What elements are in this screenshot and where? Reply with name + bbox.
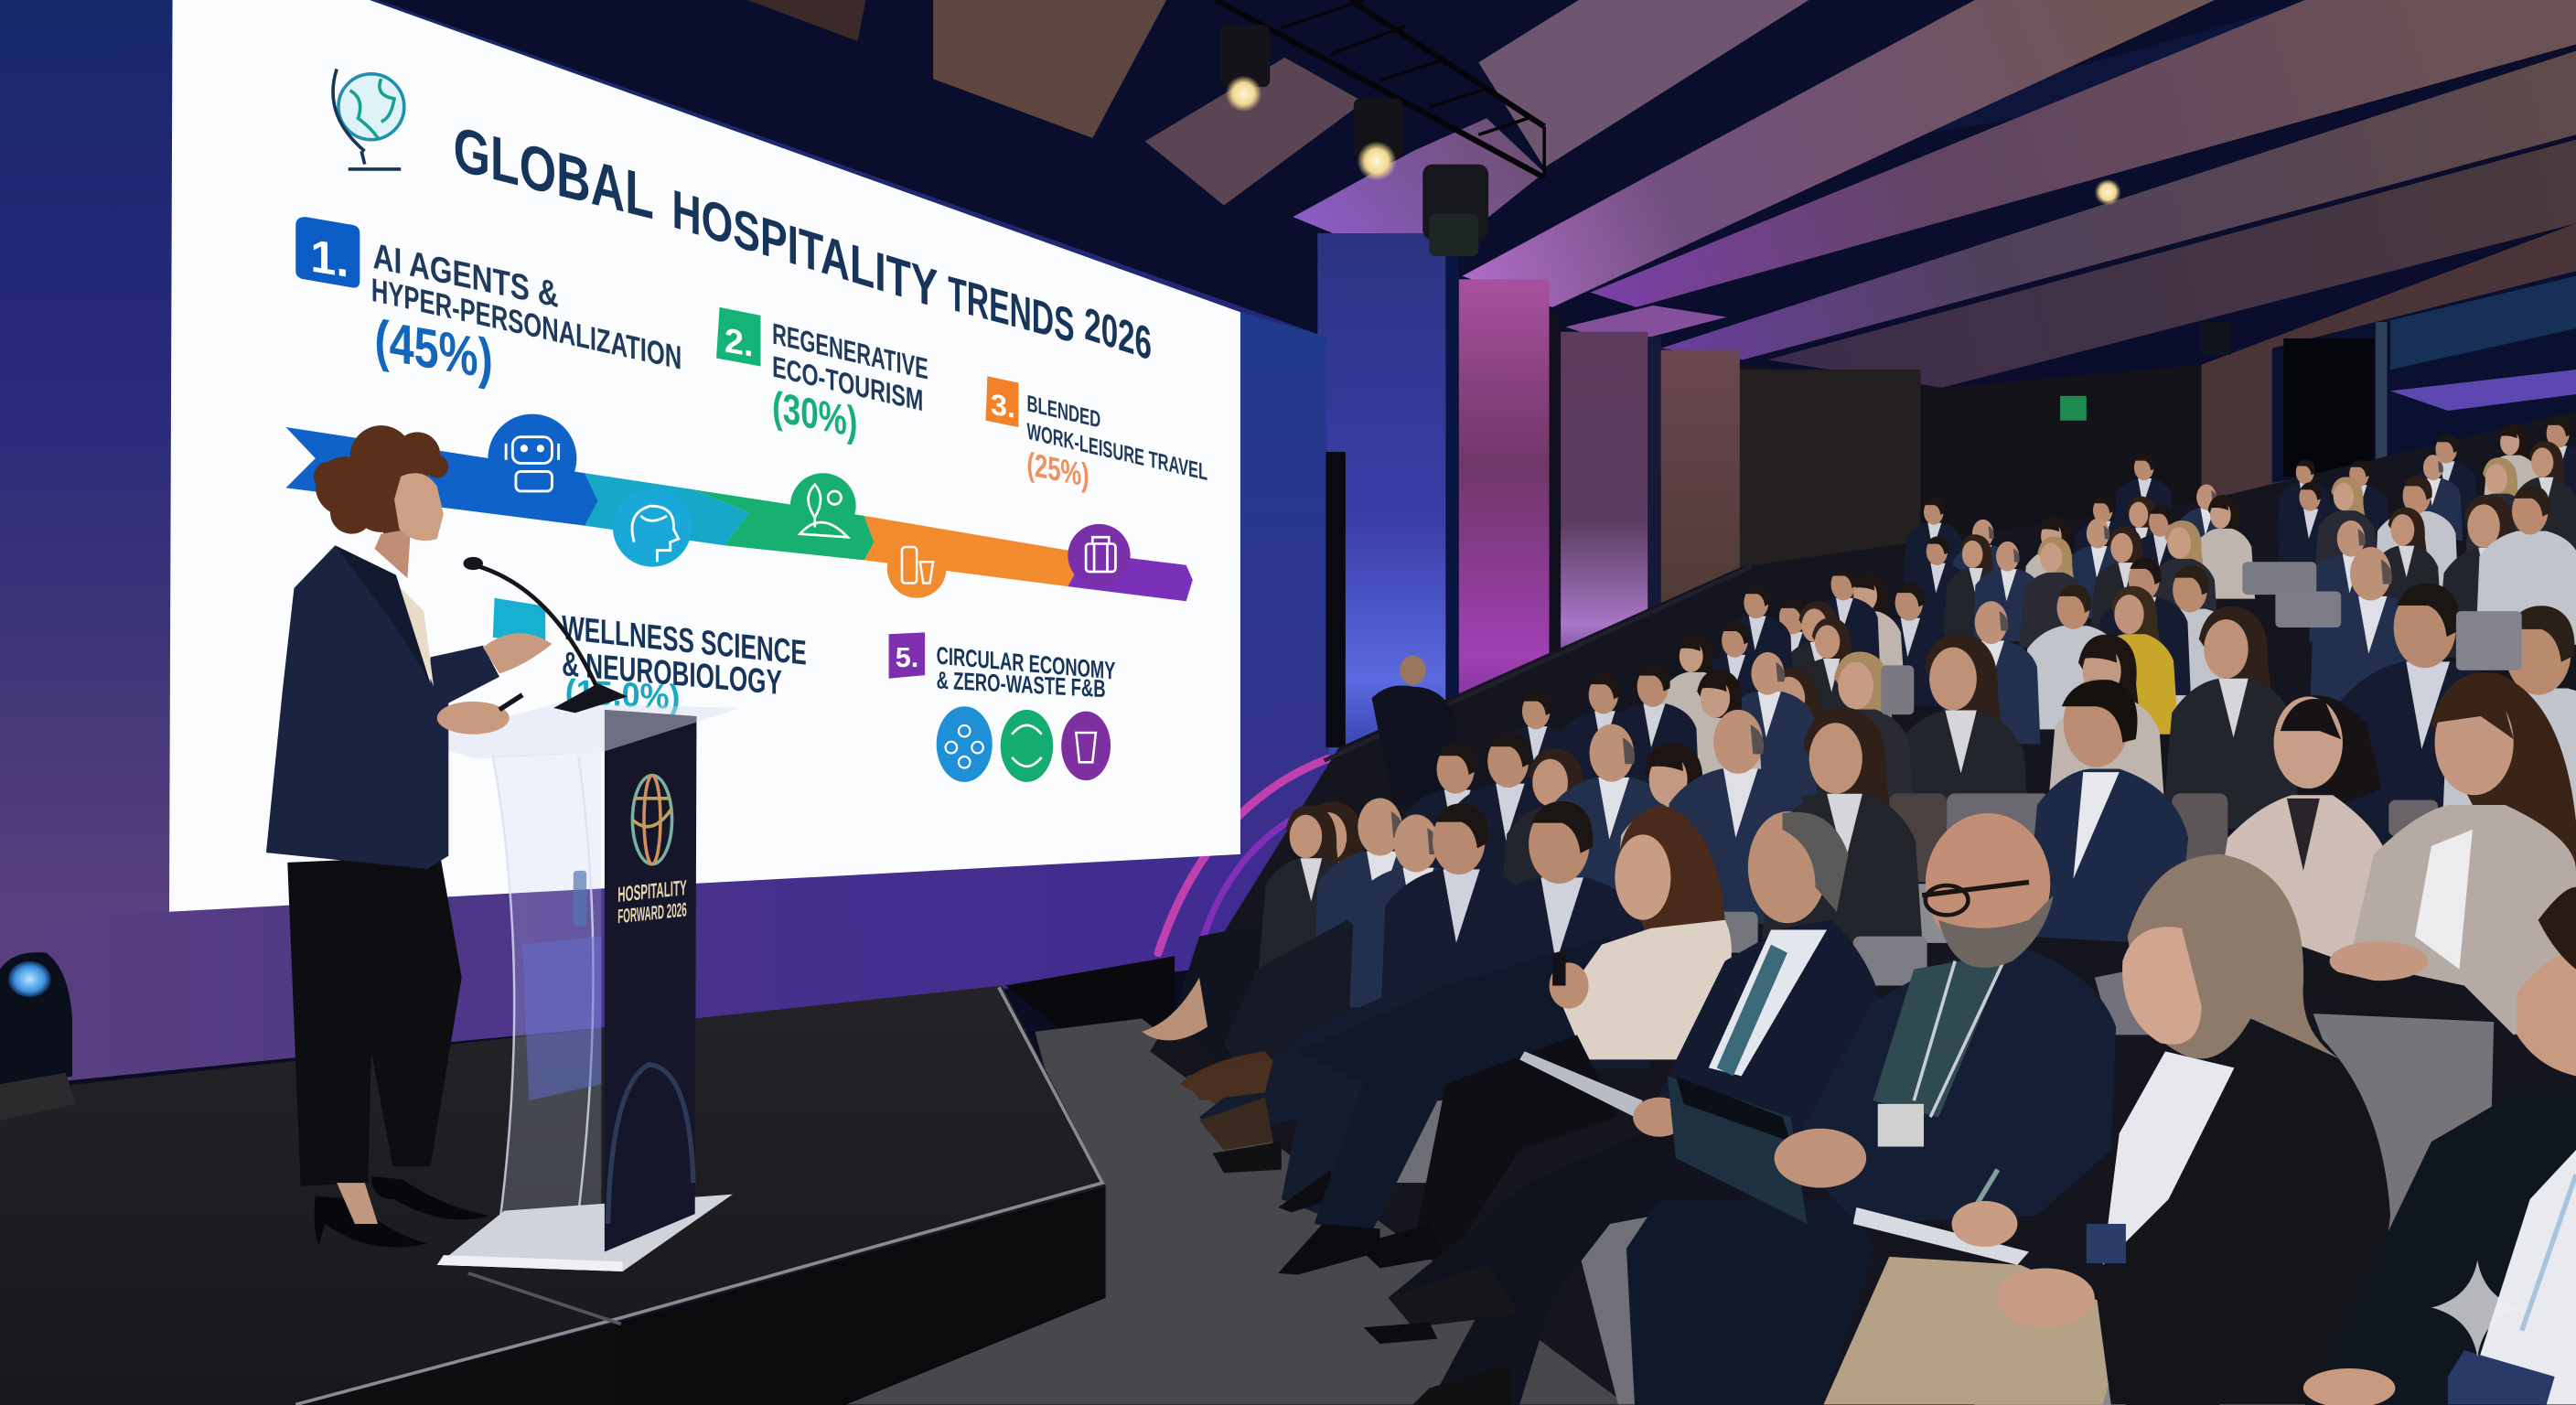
lectern base: [437, 1195, 733, 1271]
speaker jacket: [266, 545, 499, 869]
icon: recycle circle: [1001, 710, 1053, 782]
man in navy suit: [2025, 679, 2188, 945]
speaker hands: [483, 633, 552, 673]
LED wall: [0, 0, 1346, 1088]
speaker legs: [287, 856, 462, 1186]
lectern logo: [632, 776, 672, 864]
window: [2272, 271, 2576, 483]
item 1: AI agents: AI AGENTS &: [373, 236, 559, 316]
icon: leaf and hill: [790, 473, 856, 539]
woman at far right edge: [2303, 887, 2576, 1405]
item 3: blended travel: (25%): [1026, 445, 1089, 494]
icon: globe: [333, 69, 404, 169]
item 2: regenerative eco-tourism: [716, 307, 928, 446]
icon: suitcase: [1068, 524, 1131, 586]
stair railing: [1325, 567, 1751, 761]
item 3: blended travel: BLENDED: [1026, 391, 1100, 434]
swoosh graphic: [1158, 759, 1327, 953]
ceiling backdrop: [0, 0, 2576, 585]
sparkle watermark: [2431, 1260, 2520, 1357]
tablet: [1668, 1076, 1808, 1224]
woman in grey blazer, front right: [2292, 672, 2576, 1067]
item 5: circular economy: CIRCULAR ECONOMY: [937, 642, 1115, 685]
icon: brain: [613, 488, 692, 567]
icon: robot: [488, 414, 576, 503]
item 2: regenerative eco-tourism: REGENERATIVE: [772, 316, 928, 386]
lectern text: [617, 875, 687, 928]
stage spotlights: [1220, 25, 2121, 256]
floor and stage: [0, 956, 1643, 1405]
speaker: [266, 425, 552, 1248]
item 4: wellness science: (15.0%): [565, 672, 681, 716]
item 2: regenerative eco-tourism: ECO-TOURISM: [772, 349, 923, 417]
title: TRENDS: [948, 266, 1075, 353]
bald man with glasses: [1626, 813, 2116, 1405]
timeline ribbon: [285, 414, 1193, 601]
speaker blouse: [391, 578, 434, 687]
title: HOSPITALITY: [672, 177, 938, 319]
standing staff member: [1372, 656, 1457, 805]
microphone: [463, 557, 628, 713]
audience area backdrop: [1150, 411, 2576, 1405]
title: GLOBAL: [454, 113, 654, 232]
lectern glass body: [493, 753, 601, 1265]
item 3: blended travel: 3.: [991, 388, 1015, 424]
bottle on lectern: [574, 871, 586, 927]
ceiling panels: [747, 0, 2576, 388]
speaker curly hair: [314, 425, 448, 539]
item 4: wellness science: & NEUROBIOLOGY: [562, 645, 782, 702]
icon: network circle: [937, 706, 993, 782]
stage moving-head light: [0, 952, 76, 1121]
audience middle rows: [1494, 606, 2300, 871]
wall columns with uplights: [1317, 233, 1740, 759]
icon: bottle and cup: [887, 539, 946, 598]
speaker neck and face: [374, 529, 411, 578]
lectern front panel: [605, 710, 696, 1251]
lectern: [413, 703, 741, 1271]
lectern: FORWARD 2026: [617, 897, 687, 928]
speaker shoes: [315, 1196, 427, 1248]
slide screen: [169, 0, 1240, 912]
item 2: regenerative eco-tourism: 2.: [724, 322, 753, 365]
item 5: circular economy: & ZERO-WASTE F&B: [937, 667, 1106, 702]
slatted side wall: [2202, 223, 2576, 526]
front row far-left attendees: [1142, 798, 1650, 1275]
woman in cream jacket, middle row: [2215, 695, 2388, 970]
ceiling truss: [1216, 0, 1544, 177]
item 2: regenerative eco-tourism: (30%): [772, 381, 857, 446]
middle row seats: [1862, 562, 2522, 943]
back wall: [1740, 365, 2202, 592]
audience third row: [1399, 672, 2576, 1067]
lectern glass top: [413, 703, 741, 759]
woman in cream jacket, front row: [1356, 805, 1732, 1268]
item 1: AI agents: [295, 217, 682, 391]
man with grey hair and tie: [1364, 811, 1884, 1405]
item 1: AI agents: HYPER-PERSONALIZATION: [371, 271, 682, 377]
lectern: HOSPITALITY: [617, 875, 687, 906]
wall speakers: [1602, 322, 2231, 506]
legs and shoes, far left: [1173, 920, 1315, 1067]
title: 2026: [1084, 296, 1152, 370]
title: [454, 113, 1152, 370]
item 1: AI agents: (45%): [374, 308, 493, 391]
item 3: blended travel: WORK-LEISURE TRAVEL: [1026, 419, 1208, 486]
item 1: AI agents: 1.: [310, 230, 349, 287]
item 4: wellness science: WELLNESS SCIENCE: [562, 609, 807, 673]
icon: zero waste circle: [1061, 712, 1111, 780]
item 5: circular economy: 5.: [896, 642, 918, 673]
audience rear rows: [1657, 417, 2576, 896]
item 3: blended travel: [986, 376, 1208, 494]
exit sign: [2060, 396, 2087, 421]
front row seats: [1397, 912, 2494, 1405]
woman in hijab: [1823, 854, 2390, 1405]
item 5: circular economy: [889, 632, 1115, 782]
item 4: wellness science: [493, 598, 807, 716]
